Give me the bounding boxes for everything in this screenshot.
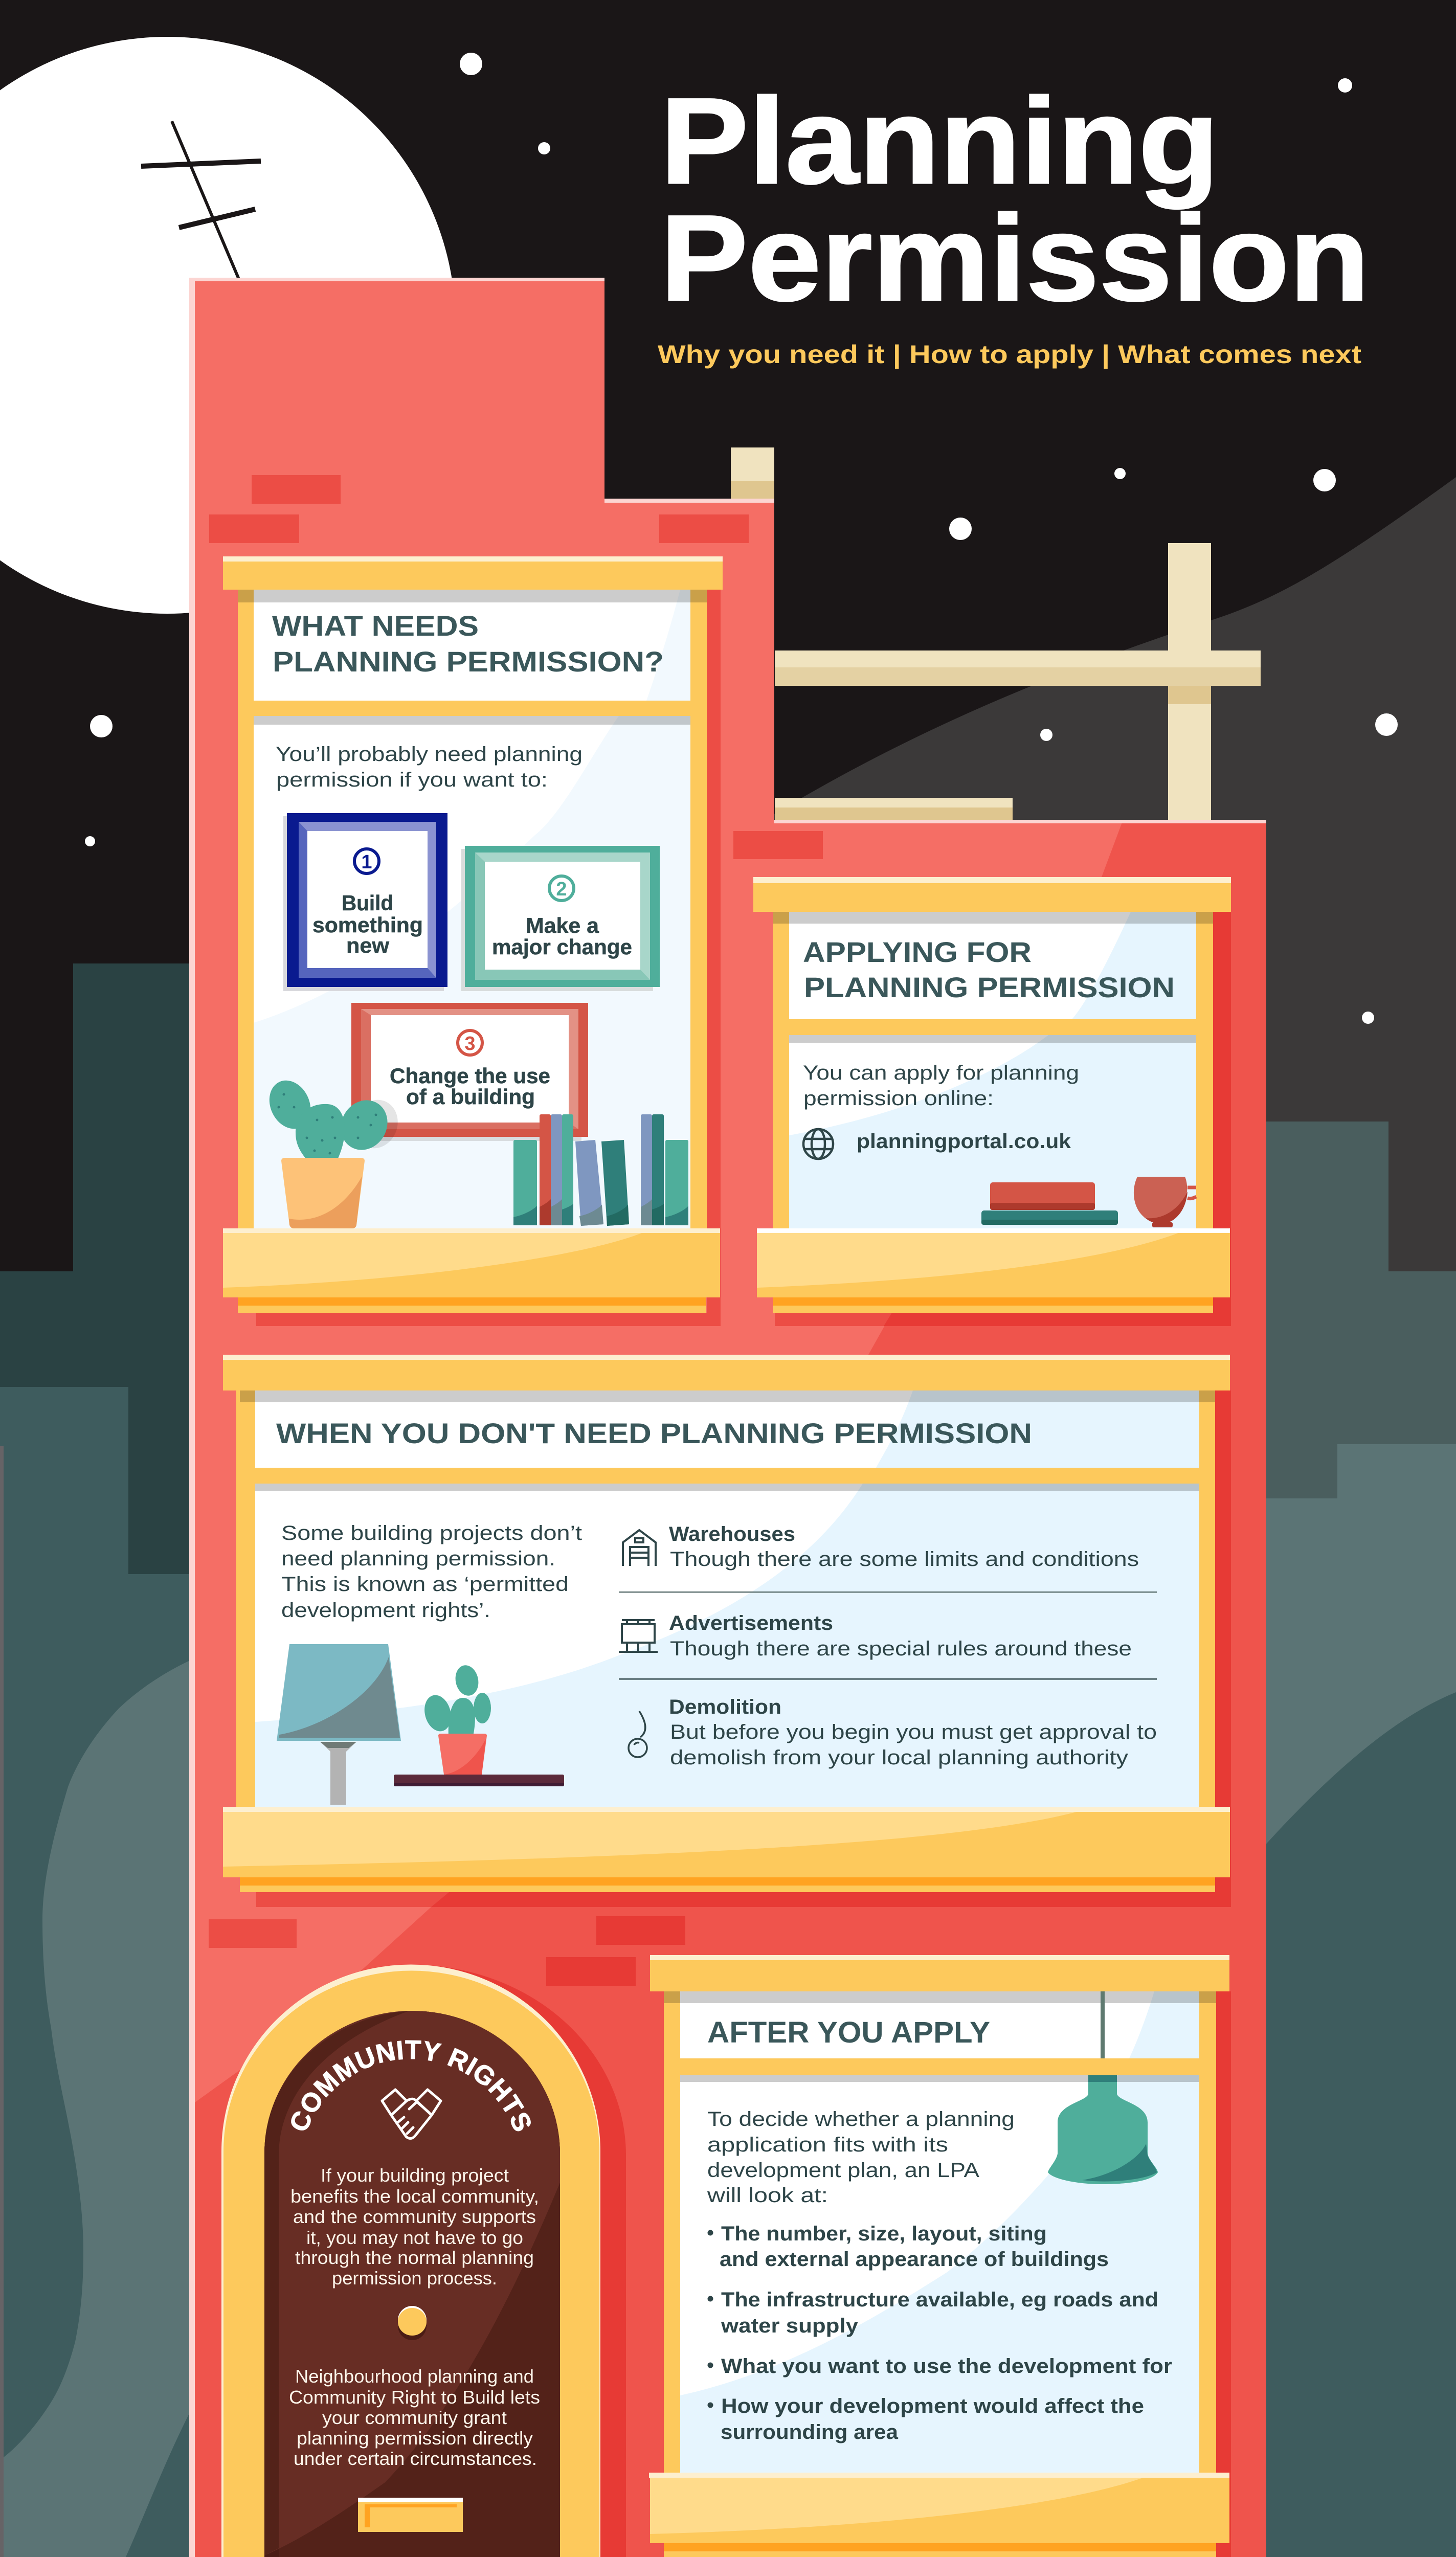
stars bbox=[85, 53, 1398, 1024]
arc guide for heading bbox=[301, 2059, 520, 2151]
item: warehouses: Warehouses bbox=[669, 1523, 795, 1545]
letterbox bbox=[358, 2498, 463, 2532]
item: demolition bbox=[629, 1696, 1157, 1769]
heading: PLANNING PERMISSION? bbox=[273, 645, 664, 678]
icon: books bbox=[513, 1114, 688, 1226]
body text: Community Right to Build lets bbox=[289, 2387, 540, 2408]
grey hill bbox=[767, 477, 1456, 1330]
body text: benefits the local community, bbox=[290, 2186, 539, 2207]
picture frame 1: build something new: 1 bbox=[361, 851, 372, 873]
body text bbox=[803, 1062, 1079, 1110]
body text: it, you may not have to go bbox=[306, 2227, 523, 2248]
picture frame 3: change the use of a building: Change the use bbox=[390, 1064, 550, 1088]
icon: table lamp bbox=[277, 1644, 401, 1805]
intro text bbox=[276, 743, 583, 791]
panel: when you don't need planning permission bbox=[223, 1355, 1231, 1907]
heading: WHEN YOU DON'T NEED PLANNING PERMISSION bbox=[276, 1417, 1032, 1449]
intro text: permission if you want to: bbox=[276, 769, 548, 791]
low roof block bbox=[775, 798, 1013, 820]
body text: application fits with its bbox=[707, 2134, 948, 2156]
building wall bbox=[189, 278, 1266, 2557]
title: Permission bbox=[660, 190, 1370, 326]
intro text: This is known as ‘permitted bbox=[281, 1573, 569, 1596]
picture frame 1: build something new: new bbox=[346, 933, 389, 957]
item: demolition: But before you begin you must get approval to bbox=[670, 1721, 1157, 1743]
icon: wrecking ball bbox=[629, 1711, 647, 1757]
icon: warehouse bbox=[623, 1530, 656, 1566]
door knob bbox=[398, 2306, 427, 2340]
icon: globe bbox=[803, 1129, 833, 1159]
body text: and the community supports bbox=[293, 2206, 536, 2227]
window sill bbox=[757, 1228, 1230, 1313]
picture frame 2: make a major change: major change bbox=[492, 935, 632, 959]
wall bricks bbox=[209, 475, 823, 1986]
panel: community rights door bbox=[221, 1965, 626, 2557]
icon: pendant lamp bbox=[1048, 1991, 1158, 2184]
bullet list: The infrastructure available, eg roads and bbox=[721, 2289, 1158, 2311]
right skyline bbox=[1263, 1122, 1456, 2557]
body text: You can apply for planning bbox=[803, 1062, 1079, 1084]
bullet list: What you want to use the development for bbox=[721, 2355, 1172, 2377]
icon: potted plant on shelf bbox=[394, 1663, 564, 1786]
antenna bbox=[141, 121, 261, 280]
icon: billboard bbox=[619, 1619, 658, 1652]
body text: To decide whether a planning bbox=[707, 2108, 1015, 2130]
body text bbox=[290, 2165, 539, 2289]
item: warehouses: Though there are some limits and conditions bbox=[670, 1548, 1139, 1571]
bullet list: surrounding area bbox=[721, 2421, 899, 2443]
heading: WHAT NEEDS bbox=[272, 610, 479, 642]
intro text: need planning permission. bbox=[281, 1547, 555, 1570]
body text: If your building project bbox=[321, 2165, 509, 2186]
icon: cup bbox=[1134, 1177, 1196, 1227]
left edge strip bbox=[0, 1446, 4, 2557]
picture frame 2: make a major change bbox=[461, 846, 660, 991]
item: demolition: Demolition bbox=[669, 1696, 781, 1718]
body text bbox=[707, 2108, 1015, 2207]
heading: AFTER YOU APPLY bbox=[707, 2016, 990, 2049]
icon: cactus in pot bbox=[262, 1074, 405, 1228]
item: warehouses bbox=[623, 1523, 1139, 1571]
body text: permission online: bbox=[803, 1087, 994, 1110]
heading bbox=[803, 936, 1175, 1003]
title bbox=[660, 73, 1370, 326]
body text: planning permission directly bbox=[297, 2428, 533, 2449]
item: advertisements: Advertisements bbox=[669, 1612, 833, 1634]
picture frame 1: build something new: Build bbox=[342, 891, 393, 915]
picture frame 2: make a major change: Make a bbox=[526, 913, 599, 937]
heading: APPLYING FOR bbox=[803, 936, 1032, 968]
heading: PLANNING PERMISSION bbox=[804, 971, 1175, 1003]
body text: Neighbourhood planning and bbox=[295, 2366, 534, 2387]
title: Planning bbox=[660, 73, 1219, 209]
window sill bbox=[223, 1228, 720, 1313]
picture frame 3: change the use of a building: 3 bbox=[464, 1033, 476, 1055]
heading bbox=[272, 610, 664, 678]
bullet list: The number, size, layout, siting bbox=[721, 2223, 1047, 2245]
item: advertisements: Though there are special rules around these bbox=[670, 1638, 1132, 1660]
bullet list bbox=[708, 2223, 1172, 2443]
icon: stacked books bbox=[981, 1182, 1118, 1225]
heading on arc: COMMUNITY RIGHTS bbox=[291, 2040, 531, 2132]
subtitle: Why you need it | How to apply | What comes next bbox=[658, 340, 1361, 369]
intro text: Some building projects don’t bbox=[281, 1522, 582, 1544]
picture frame 2: make a major change: 2 bbox=[556, 879, 567, 900]
panel: applying for planning permission bbox=[753, 877, 1231, 1326]
window sill bbox=[649, 2473, 1229, 2557]
intro text: development rights’. bbox=[281, 1599, 490, 1622]
body text: through the normal planning bbox=[295, 2247, 534, 2268]
bullet list: How your development would affect the bbox=[721, 2395, 1144, 2417]
moon bbox=[0, 37, 456, 614]
body text: permission process. bbox=[332, 2268, 497, 2289]
body text bbox=[289, 2366, 540, 2469]
chimney small bbox=[731, 447, 774, 499]
panel: what needs planning permission bbox=[223, 556, 723, 1326]
body text: your community grant bbox=[322, 2407, 507, 2428]
intro text bbox=[281, 1522, 582, 1622]
picture frame 1: build something new bbox=[283, 813, 447, 991]
body text: development plan, an LPA bbox=[707, 2159, 979, 2182]
item: demolition: demolish from your local planning authority bbox=[670, 1746, 1128, 1769]
bullet list: water supply bbox=[721, 2315, 859, 2337]
item: advertisements bbox=[619, 1612, 1132, 1660]
left skyline bbox=[0, 963, 194, 2557]
picture frame 3: change the use of a building: of a building bbox=[406, 1085, 535, 1109]
roof post and crossbar bbox=[775, 543, 1261, 820]
window sill bbox=[223, 1807, 1230, 1892]
icon: handshake bbox=[382, 2090, 441, 2139]
body text: under certain circumstances. bbox=[294, 2448, 537, 2469]
bullet list: and external appearance of buildings bbox=[720, 2248, 1109, 2271]
website link: planningportal.co.uk bbox=[857, 1130, 1071, 1153]
intro text: You’ll probably need planning bbox=[276, 743, 583, 766]
picture frame 3: change the use of a building bbox=[351, 1003, 588, 1141]
picture frame 1: build something new: something bbox=[312, 913, 423, 937]
body text: will look at: bbox=[707, 2184, 828, 2207]
panel: after you apply bbox=[649, 1955, 1231, 2557]
